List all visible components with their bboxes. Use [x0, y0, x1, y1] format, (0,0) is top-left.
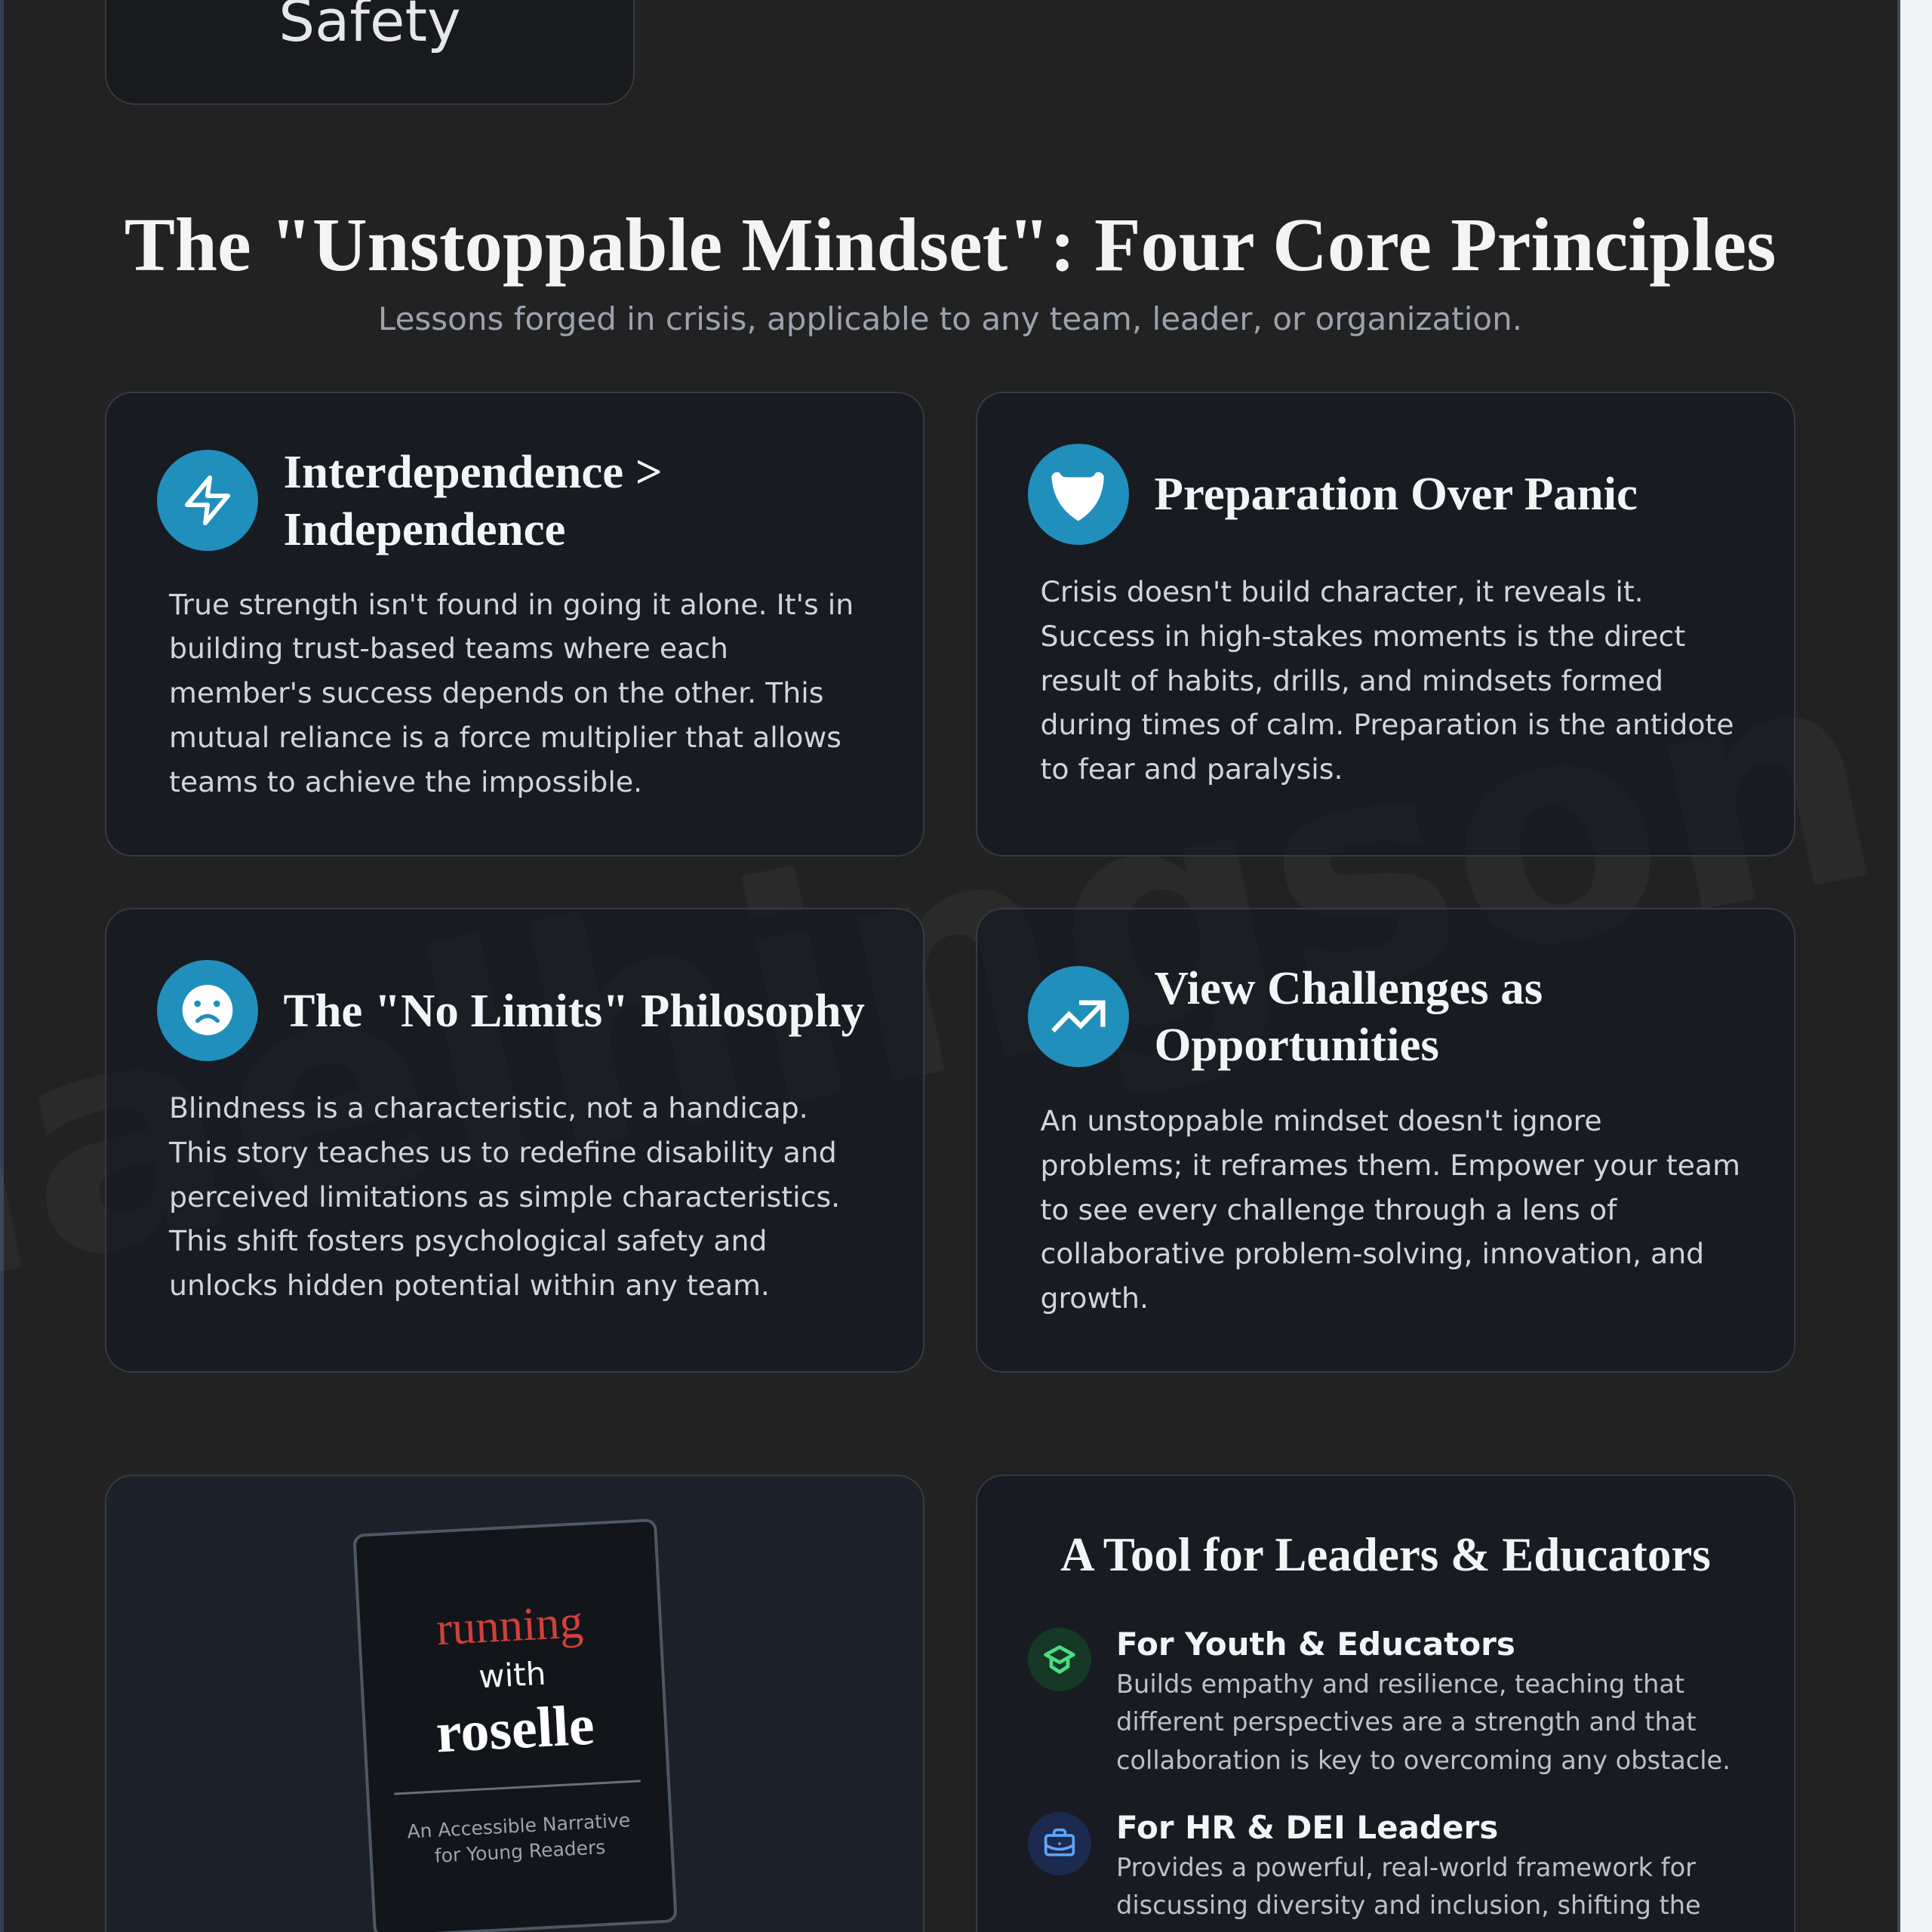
- cover rule: [394, 1780, 641, 1795]
- body text: This story teaches us to redefine disability and: [169, 1136, 837, 1169]
- heading: [284, 445, 663, 555]
- item text: youth: collaboration is key to overcoming any obstacle.: [1116, 1746, 1730, 1775]
- icon: sad face: [157, 960, 258, 1061]
- panel: preparation: [976, 392, 1795, 857]
- icon: lightning bolt: [157, 450, 258, 551]
- panel: interdependence: [105, 392, 924, 857]
- heading: Interdependence >: [284, 445, 663, 498]
- body text: to see every challenge through a lens of: [1040, 1192, 1617, 1226]
- title: The "Unstoppable Mindset": Four Core Principles: [125, 202, 1776, 287]
- body text: True strength isn't found in going it alone. It's in: [169, 588, 854, 621]
- book title: running: running: [435, 1595, 584, 1655]
- item title: youth: For Youth & Educators: [1116, 1626, 1515, 1663]
- panel: challenges: [976, 908, 1795, 1373]
- body text: problems; it reframes them. Empower your team: [1040, 1149, 1740, 1182]
- body text: perceived limitations as simple characteristics.: [169, 1180, 840, 1214]
- body text: collaborative problem-solving, innovation, and: [1040, 1237, 1704, 1270]
- heading: Independence: [284, 503, 565, 555]
- item text: youth: Builds empathy and resilience, teaching that: [1116, 1669, 1684, 1699]
- book title: roselle: roselle: [435, 1693, 595, 1764]
- item text: HR: discussing diversity and inclusion, shifting the: [1116, 1890, 1701, 1920]
- panel: no limits: [105, 908, 924, 1373]
- item text: youth: [1116, 1669, 1730, 1775]
- book subtitle: An Accessible Narrative: [407, 1809, 631, 1842]
- body text: Crisis doesn't build character, it reveals it.: [1040, 575, 1644, 608]
- body text: result of habits, drills, and mindsets formed: [1040, 664, 1663, 697]
- item text: HR: [1116, 1853, 1701, 1920]
- body text: during times of calm. Preparation is the antidote: [1040, 708, 1734, 741]
- body text: growth.: [1040, 1281, 1149, 1315]
- panel: book showcase: [105, 1475, 924, 1932]
- panel heading: A Tool for Leaders & Educators: [1060, 1528, 1711, 1581]
- body text: building trust-based teams where each: [169, 632, 728, 665]
- heading: Opportunities: [1155, 1018, 1439, 1071]
- icon: shield: [1028, 444, 1129, 545]
- heading: Preparation Over Panic: [1155, 467, 1638, 520]
- body text: [1040, 1104, 1740, 1315]
- body text: Success in high-stakes moments is the direct: [1040, 620, 1685, 653]
- body text: Blindness is a characteristic, not a handicap.: [169, 1091, 808, 1124]
- body text: unlocks hidden potential within any team.: [169, 1269, 770, 1302]
- heading: View Challenges as: [1155, 961, 1543, 1014]
- book cover: [352, 1518, 678, 1932]
- item text: youth: different perspectives are a strength and that: [1116, 1707, 1697, 1737]
- book title: with: with: [478, 1654, 547, 1695]
- body text: An unstoppable mindset doesn't ignore: [1040, 1104, 1602, 1137]
- book subtitle: for Young Readers: [434, 1835, 606, 1866]
- body text: to fear and paralysis.: [1040, 752, 1343, 786]
- body text: teams to achieve the impossible.: [169, 765, 642, 798]
- book subtitle: [407, 1809, 631, 1866]
- body text: [169, 588, 854, 798]
- body text: mutual reliance is a force multiplier that allows: [169, 721, 841, 754]
- item title: HR: For HR & DEI Leaders: [1116, 1809, 1498, 1846]
- item text: HR: Provides a powerful, real-world framework for: [1116, 1853, 1696, 1882]
- body text: This shift fosters psychological safety and: [169, 1224, 768, 1257]
- heading: The "No Limits" Philosophy: [284, 984, 865, 1037]
- body text: member's success depends on the other. This: [169, 676, 823, 709]
- subtitle: Lessons forged in crisis, applicable to any team, leader, or organization.: [378, 300, 1522, 337]
- body text: [1040, 575, 1734, 786]
- body text: [169, 1091, 840, 1302]
- icon: graduation cap: [1028, 1628, 1091, 1691]
- icon: briefcase: [1028, 1812, 1091, 1875]
- panel: safety card (cropped): [105, 0, 635, 105]
- icon: trending up: [1028, 966, 1129, 1067]
- panel: tool for leaders: [976, 1475, 1795, 1932]
- heading: [1155, 961, 1543, 1071]
